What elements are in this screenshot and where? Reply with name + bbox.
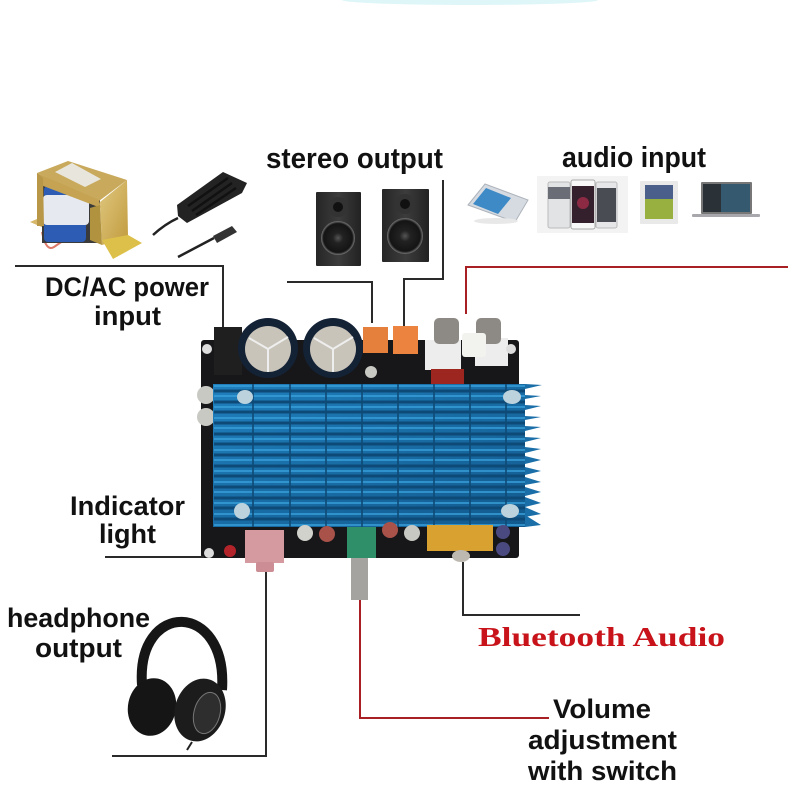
- label: volume adjustment with switch: with switch: [527, 756, 677, 786]
- bluetooth module: [427, 525, 493, 551]
- heading: Bluetooth Audio: Bluetooth Audio: [478, 622, 725, 652]
- label: DC/AC power input: DC/AC power: [45, 272, 209, 302]
- RCA sockets: [425, 318, 508, 384]
- label: DC/AC power input: input: [94, 301, 161, 331]
- icon: power adapter: [153, 172, 247, 257]
- heading: audio input: audio input: [562, 142, 706, 174]
- heatsink: [213, 384, 542, 527]
- icon: headphones: [122, 622, 234, 750]
- decorative cyan smear at top: [342, 0, 598, 5]
- arrow: volume red line: [360, 600, 549, 718]
- bluetooth connector: [452, 550, 470, 562]
- capacitor left: [238, 318, 298, 378]
- DC jack: [214, 327, 242, 375]
- arrow: stereo output right channel line: [404, 180, 443, 326]
- arrow: bluetooth line: [463, 562, 580, 615]
- label: volume adjustment with switch: adjustment: [528, 725, 677, 755]
- indicator LED: [224, 545, 236, 557]
- bottom capacitors: [297, 522, 510, 556]
- volume potentiometer: [347, 527, 376, 600]
- headphone jack: [245, 530, 284, 572]
- heatsink standoffs: [237, 390, 253, 404]
- icon: laptop: [692, 182, 760, 217]
- amplifier board: [197, 318, 542, 600]
- label: headphone output: [7, 603, 150, 663]
- icon: transformer: [30, 9, 142, 259]
- capacitor right: [303, 318, 363, 378]
- arrow: power connector line: [15, 266, 223, 328]
- icon: tablet: [640, 181, 678, 224]
- terminal right: [393, 326, 418, 354]
- icon: speaker right: [382, 189, 429, 262]
- arrow: stereo output left channel line: [287, 282, 372, 323]
- icon: media player: [468, 184, 528, 224]
- PCB: [201, 340, 519, 558]
- label: indicator light: [70, 491, 185, 549]
- label: indicator light: Indicator: [70, 491, 185, 521]
- icon: speaker left: [316, 192, 361, 266]
- terminal left: [363, 327, 388, 353]
- label: headphone output: headphone: [7, 603, 150, 633]
- mounting holes: [202, 344, 516, 558]
- label: DC/AC power input: [45, 272, 209, 331]
- arrow: indicator line: [105, 556, 204, 558]
- label: headphone output: output: [35, 633, 122, 663]
- icon: phones: [537, 176, 628, 233]
- arrow: headphone line: [112, 572, 266, 756]
- arrow: audio input red line: [466, 267, 788, 314]
- heading: stereo output: stereo output: [266, 143, 443, 175]
- label: volume adjustment with switch: [527, 694, 677, 786]
- label: indicator light: light: [99, 519, 156, 549]
- label: volume adjustment with switch: Volume: [553, 694, 651, 724]
- small capacitors: [197, 366, 377, 426]
